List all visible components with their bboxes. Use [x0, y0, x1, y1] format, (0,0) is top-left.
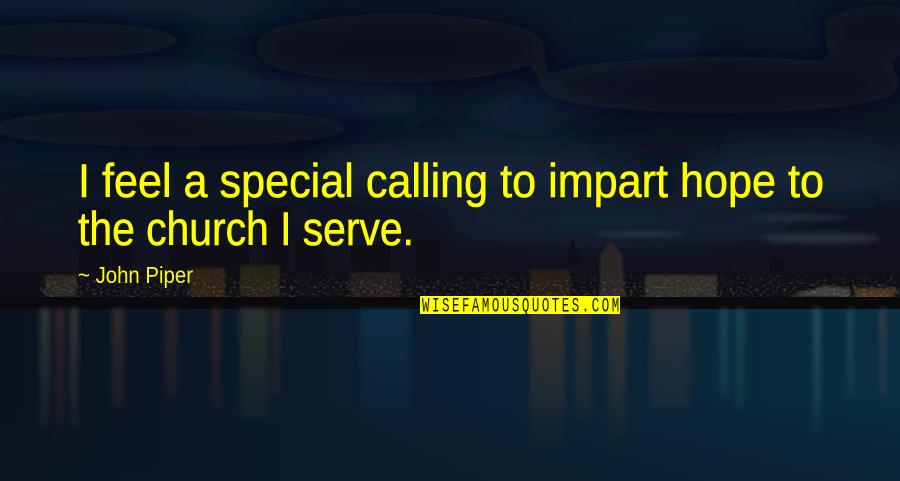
background: city skyline — [0, 205, 900, 310]
quote text: I feel a special calling to impart hope to — [78, 154, 824, 207]
quote text: the church I serve. — [78, 202, 414, 255]
attribution: ~ John Piper — [78, 262, 193, 288]
background: water with light reflections — [0, 308, 900, 481]
watermark badge: WISEFAMOUSQUOTES.COM — [422, 295, 619, 318]
background: night sky with clouds — [0, 0, 900, 310]
quote text — [78, 154, 824, 255]
